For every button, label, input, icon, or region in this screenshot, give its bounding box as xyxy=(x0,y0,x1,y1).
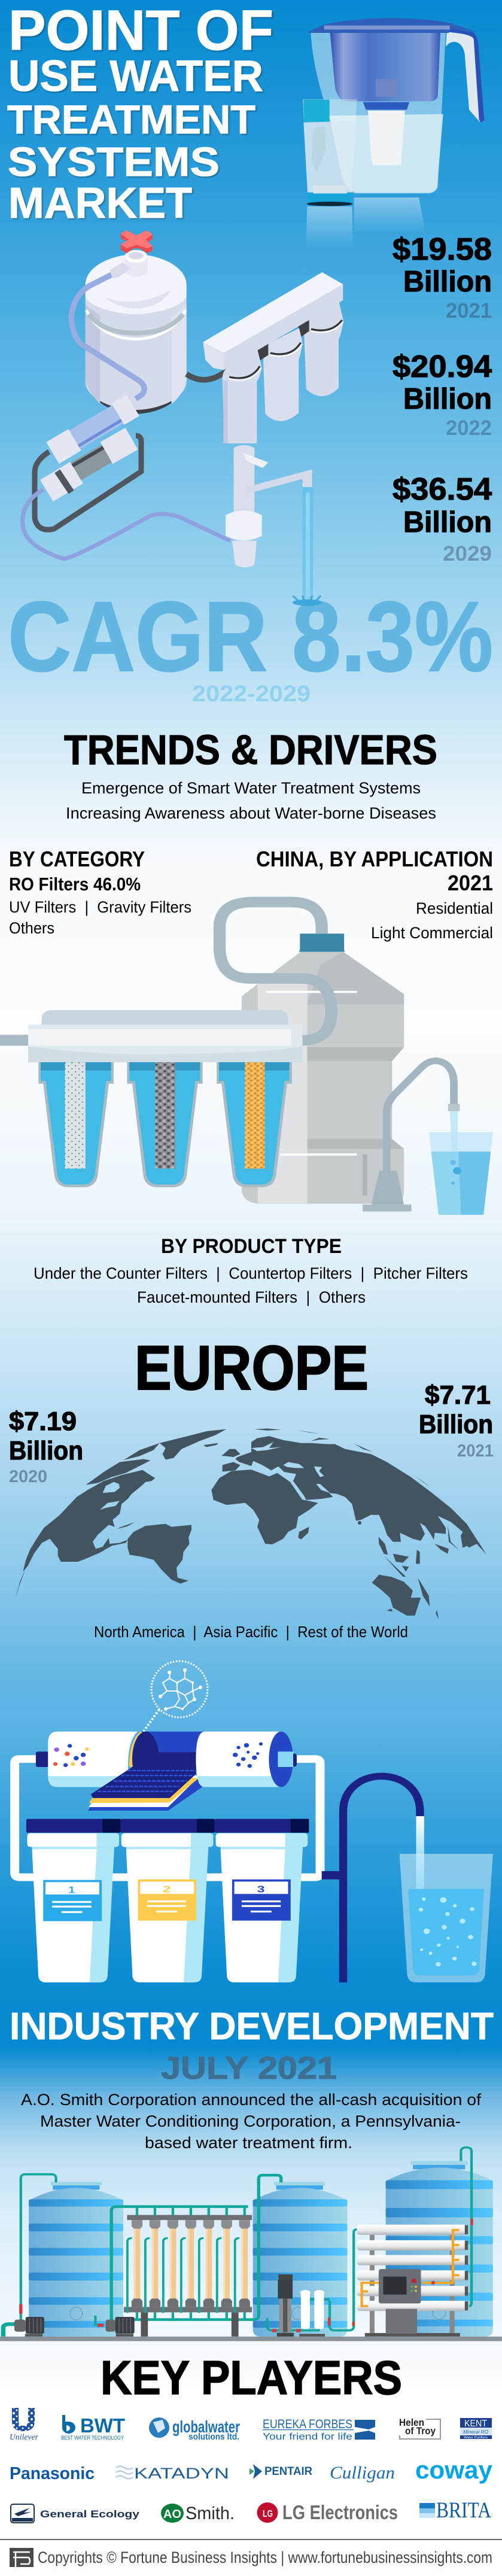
text: China by application: Residential xyxy=(416,899,493,917)
lid xyxy=(307,18,477,33)
stat: Europe 2020: $7.19 xyxy=(9,1407,77,1436)
icon: Fortune Business Insights mark xyxy=(10,2548,34,2567)
logo: BWT xyxy=(61,2414,125,2441)
stat: 2029: Billion xyxy=(403,506,492,539)
icon: filter 3: 3 xyxy=(257,1884,264,1894)
icon: pump 2 xyxy=(106,2317,135,2337)
icon: tank 2 xyxy=(253,2182,347,2337)
icon: bottle cap xyxy=(299,933,345,952)
icon: membrane roll xyxy=(36,1732,297,1811)
illustration: under-sink RO system xyxy=(23,230,343,567)
icon: blue tube xyxy=(71,273,144,399)
stat: 2022: 2022 xyxy=(446,416,492,440)
stat: 2021 xyxy=(393,232,492,323)
Eurasia Africa Oceania xyxy=(211,1428,486,1619)
logo: AO Smith xyxy=(161,2504,235,2523)
text: by category xyxy=(9,847,191,937)
stat: 2022: $20.94 xyxy=(393,349,492,384)
stat: Europe 2020: 2020 xyxy=(9,1467,47,1486)
icon: RO membrane rack xyxy=(357,2225,468,2337)
text: China by application: Light Commercial xyxy=(371,924,493,942)
icon: filter 1: 1 xyxy=(68,1885,75,1895)
stat: 2021: $19.58 xyxy=(393,232,492,267)
logo: BWT: BWT xyxy=(80,2414,125,2437)
text: development description xyxy=(21,2091,482,2152)
icon: control panel xyxy=(379,2269,421,2334)
text: drivers list xyxy=(66,779,436,822)
icon: filter cartridge 2 xyxy=(127,1062,203,1187)
icon: bent tube xyxy=(220,902,331,1040)
logo: Coway: coway xyxy=(415,2456,493,2484)
icon: valves xyxy=(19,2219,473,2332)
logo: Unilever: Unilever xyxy=(10,2433,39,2442)
icon: connecting hose xyxy=(187,371,226,380)
logo: globalwater xyxy=(149,2417,240,2442)
stat: 2021: Billion xyxy=(403,266,492,298)
stat: Europe 2021 xyxy=(419,1380,494,1461)
text: development description: A.O. Smith Corporation announced the all-cash acquisition of xyxy=(21,2091,482,2109)
icon: filter cartridge 3 xyxy=(217,1062,292,1187)
stat: 2022: Billion xyxy=(403,383,492,415)
icon: white pipes xyxy=(15,1759,320,1877)
text: by product type: Faucet-mounted Filters | Others xyxy=(137,1288,366,1306)
CAGR figure: 2022-2029 xyxy=(192,682,311,707)
logo: Katadyn: KATADYN xyxy=(134,2465,229,2482)
logo: Eureka Forbes: Your friend for life xyxy=(263,2432,352,2442)
icon: filter 1 xyxy=(27,1833,119,1982)
icon: dark loop tube xyxy=(35,436,141,530)
icon: filter 3 xyxy=(216,1833,308,1982)
icon: water stream xyxy=(416,1816,424,1889)
logo: Brita xyxy=(419,2498,491,2523)
pitcher water xyxy=(329,114,443,193)
text: drivers list: Increasing Awareness about Water-borne Diseases xyxy=(66,804,436,822)
title: POINT OF xyxy=(8,0,273,62)
logo: Culligan: Culligan xyxy=(330,2463,395,2483)
system upper part xyxy=(71,230,343,443)
icon: long blue tube xyxy=(23,489,230,559)
icon: water pitcher and glass xyxy=(303,18,484,248)
title: MARKET xyxy=(8,180,192,227)
icon: molecule magnifier xyxy=(142,1661,208,1733)
icon: teal pipework xyxy=(3,2148,471,2337)
text: by category: BY CATEGORY xyxy=(9,847,145,871)
logo: KENT: Mineral RO xyxy=(463,2429,488,2435)
pitcher body xyxy=(311,33,446,193)
text: development description: based water treatment firm. xyxy=(145,2134,352,2152)
stat: Europe 2021: 2021 xyxy=(457,1441,494,1461)
logo: LG Electronics: LG xyxy=(263,2509,273,2519)
logo: globalwater: solutions ltd. xyxy=(188,2432,239,2442)
illustration: water purifier with bottle xyxy=(0,902,493,1215)
icon: filter column 3 xyxy=(298,302,343,396)
logo: Panasonic: Panasonic xyxy=(10,2464,95,2483)
text: by category: RO Filters 46.0% xyxy=(9,874,141,895)
text: drivers list: Emergence of Smart Water Treatment Systems xyxy=(81,779,421,797)
icon: filter manifold bar xyxy=(203,272,343,370)
text: by product type: Under the Counter Filters | Countertop Filters | Pitcher Filters xyxy=(34,1264,468,1282)
icon: filter column 2 xyxy=(257,328,302,421)
heading: trends and drivers: TRENDS & DRIVERS xyxy=(64,726,437,773)
stat: 2029 xyxy=(393,472,492,565)
icon: ultrafiltration rack xyxy=(124,2207,252,2337)
icon: tank 3 xyxy=(386,2161,493,2337)
text: other regions: North America | Asia Pacific | Rest of the World xyxy=(94,1623,408,1641)
stat: Europe 2020 xyxy=(9,1407,83,1486)
icon: white cartridges xyxy=(299,2290,325,2337)
text: by product type: BY PRODUCT TYPE xyxy=(161,1235,342,1258)
logo: KENT xyxy=(460,2418,492,2440)
market size figures xyxy=(393,232,492,565)
stat: 2029: 2029 xyxy=(443,542,492,565)
text: China by application xyxy=(256,847,493,942)
logo: LG Electronics: LG Electronics xyxy=(282,2501,398,2523)
stat: Europe 2020: Billion xyxy=(9,1436,83,1465)
icon: tank 1 xyxy=(29,2182,123,2337)
icon: red valve xyxy=(121,230,153,253)
icon: pump 1 xyxy=(14,2317,44,2337)
heading: industry development: INDUSTRY DEVELOPMENT xyxy=(10,2005,494,2048)
filter reservoir xyxy=(330,33,440,165)
logo: Unilever xyxy=(10,2408,39,2442)
text: by category: Others xyxy=(9,919,54,937)
text: development description: Master Water Conditioning Corporation, a Pennsylvania- xyxy=(40,2112,461,2130)
title: USE WATER xyxy=(8,52,263,101)
pitcher handle xyxy=(446,29,484,123)
logo: Helen of Troy: of Troy xyxy=(405,2425,436,2437)
ground line xyxy=(0,2337,502,2341)
icon: carbon cartridge xyxy=(47,439,132,491)
icon: filter housing xyxy=(0,1010,302,1062)
text: by product type xyxy=(34,1235,468,1306)
glass xyxy=(303,99,357,206)
heading: Europe: EUROPE xyxy=(135,1333,369,1403)
logo: Helen of Troy: Helen xyxy=(399,2417,424,2428)
icon: storage tank xyxy=(86,250,187,414)
stat: 2022 xyxy=(393,349,492,440)
key player logos xyxy=(10,2408,493,2523)
footer divider xyxy=(0,2539,502,2540)
illustration: industrial water treatment plant xyxy=(0,2148,502,2341)
icon: faucet xyxy=(226,445,312,567)
icon: contaminants dirty side xyxy=(53,1744,89,1767)
icon: filter column 1 xyxy=(223,349,261,443)
logo: KENT: KENT xyxy=(464,2419,487,2429)
icon: tube elbow xyxy=(109,262,130,278)
icon: filter 2: 2 xyxy=(163,1884,171,1894)
icon: vertical pump xyxy=(277,2274,294,2337)
logo: Pentair: PENTAIR xyxy=(264,2465,312,2478)
icon: falling water stream xyxy=(293,487,322,606)
logo: General Ecology xyxy=(11,2504,140,2523)
Americas and Greenland xyxy=(15,1429,226,1599)
logo: KENT: Water Purifiers xyxy=(464,2436,488,2440)
icon: tap xyxy=(363,1061,460,1212)
logo: AO Smith: Smith. xyxy=(185,2504,235,2523)
icon: large bottle xyxy=(242,952,404,1204)
icon: glass of water xyxy=(400,1854,493,1982)
logo: Katadyn xyxy=(116,2465,229,2482)
icon: filter cartridge 1 xyxy=(38,1062,114,1187)
logo: Brita: BRITA xyxy=(436,2498,491,2523)
heading: key players: KEY PLAYERS xyxy=(101,2351,402,2404)
icon: navy faucet xyxy=(322,1776,420,1982)
text: by category: UV Filters | Gravity Filters xyxy=(9,898,191,916)
stat: 2021: 2021 xyxy=(446,299,492,323)
logo: AO Smith: AO xyxy=(163,2508,181,2521)
icon: filter caps xyxy=(26,1819,309,1833)
logo: Pentair xyxy=(250,2464,312,2479)
illustration: three stage filter system xyxy=(15,1732,493,1982)
reflection xyxy=(306,197,426,248)
title: TREATMENT xyxy=(7,97,255,142)
logo: Eureka Forbes xyxy=(263,2417,375,2442)
stat: 2029: $36.54 xyxy=(393,472,492,507)
stat: Europe 2021: Billion xyxy=(419,1410,493,1439)
logo: Eureka Forbes: EUREKA FORBES xyxy=(263,2417,352,2431)
title xyxy=(7,0,273,227)
stat: Europe 2021: $7.71 xyxy=(425,1380,491,1410)
logo: globalwater: globalwater xyxy=(172,2417,240,2436)
icon: drinking glass xyxy=(429,1132,493,1215)
logo: General Ecology: General Ecology xyxy=(40,2508,140,2520)
text: China by application: 2021 xyxy=(448,871,493,895)
icon: filter 2 xyxy=(121,1833,213,1982)
icon: blue cartridge xyxy=(53,405,133,453)
logo: BWT: BEST WATER TECHNOLOGY xyxy=(61,2435,124,2441)
icon: contaminants clean side xyxy=(233,1742,263,1768)
heading: date: JULY 2021 xyxy=(161,2051,337,2086)
chart: world map xyxy=(15,1428,486,1619)
title: SYSTEMS xyxy=(8,139,220,185)
logo: Helen of Troy xyxy=(399,2417,440,2439)
